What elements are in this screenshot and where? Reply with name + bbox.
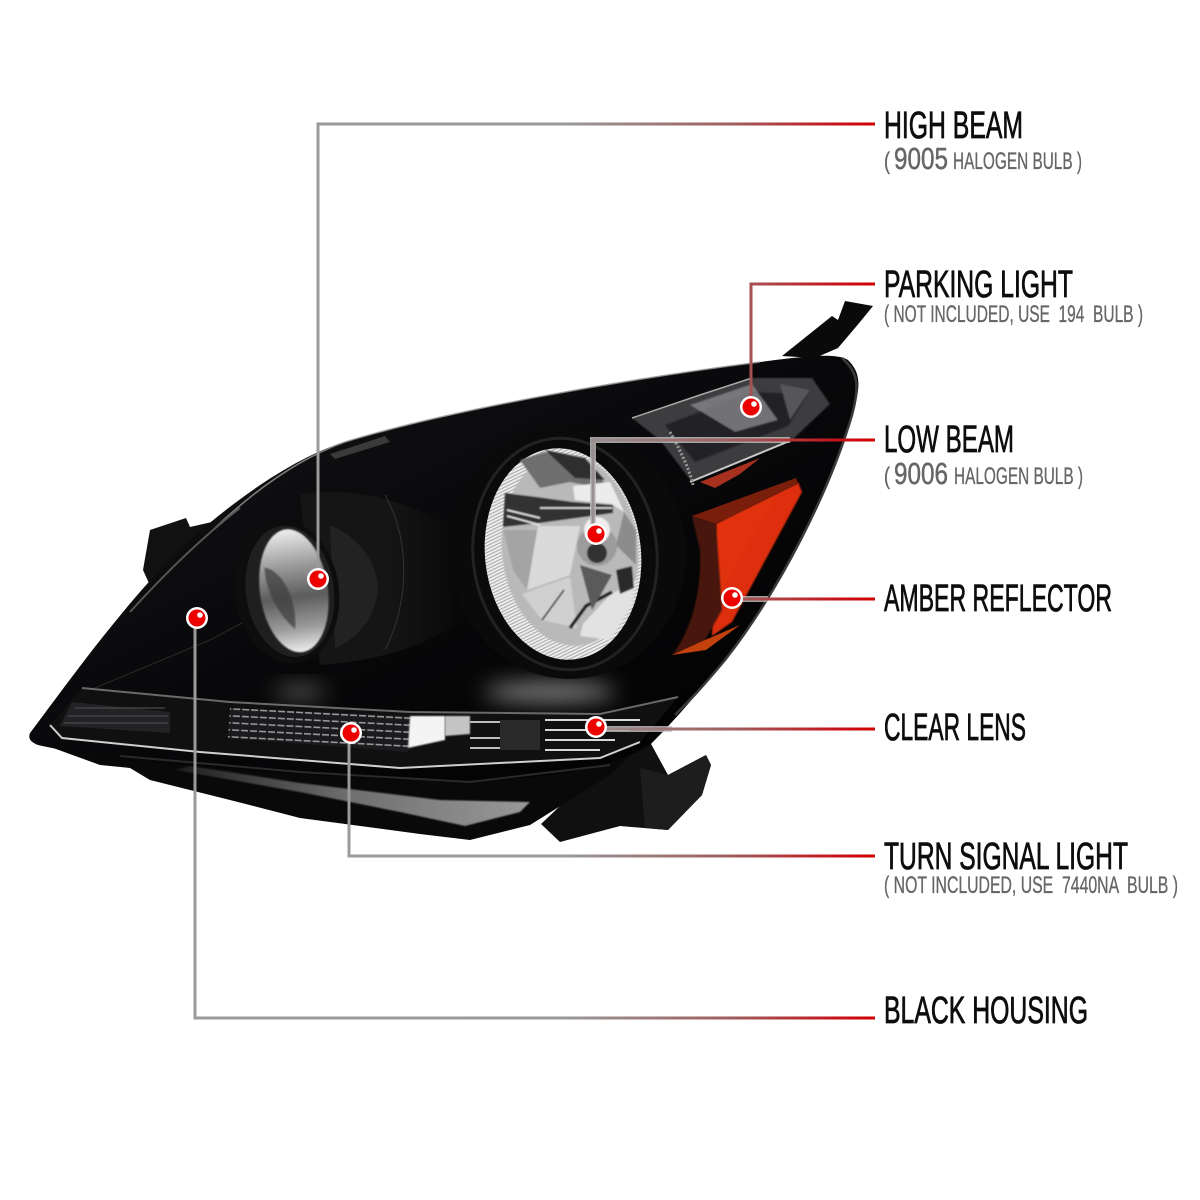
black housing [29,356,858,780]
label: turn signal light [884,836,1178,899]
label: low beam: LOW BEAM [884,419,1014,461]
low beam chrome ring [474,440,652,668]
label: parking light [884,264,1143,328]
label: high beam: 9005 [894,141,948,176]
headlight assembly [29,301,873,842]
high beam projector lens [225,513,348,670]
marker: parking light [740,396,762,418]
housing sheen [274,686,326,698]
label: low beam: ( [884,463,890,490]
callout line: low beam [593,440,875,534]
top mounting bracket [782,301,873,358]
label: high beam [884,105,1082,176]
marker: turn signal [340,722,362,744]
bottom mounting bracket [541,742,711,842]
label: low beam: 9006 [894,456,948,491]
label: low beam: HALOGEN BULB ) [954,463,1083,490]
clear turn signal lens [50,688,678,768]
marker: high beam [307,568,329,590]
projector barrel [300,492,475,665]
low beam reflector [492,447,648,653]
label: parking light: PARKING LIGHT [884,264,1073,306]
label: high beam: HALOGEN BULB ) [953,148,1082,175]
label: high beam: HIGH BEAM [884,105,1023,147]
label: high beam: ( [884,148,890,175]
callout line: parking light [751,284,875,407]
lower lens strip [45,745,640,840]
marker: low beam [585,523,607,545]
low beam bulb [577,526,617,566]
marker: clear lens [585,716,607,738]
low beam lens bezel [437,415,699,691]
marker: black housing [186,607,208,629]
callout line: black housing [195,618,875,1018]
parking light lens [632,378,830,482]
housing edge highlights [215,362,760,528]
callout line: amber reflector [732,596,875,602]
label: low beam [884,419,1083,491]
left mounting bracket [143,518,212,590]
callout line: turn signal [349,733,875,856]
callout line: clear lens [596,726,875,732]
label: clear lens: CLEAR LENS [884,707,1026,749]
callout line: high beam [318,124,875,579]
label: black housing: BLACK HOUSING [884,990,1088,1032]
amber reflector [712,482,802,636]
marker: amber reflector [721,587,743,609]
